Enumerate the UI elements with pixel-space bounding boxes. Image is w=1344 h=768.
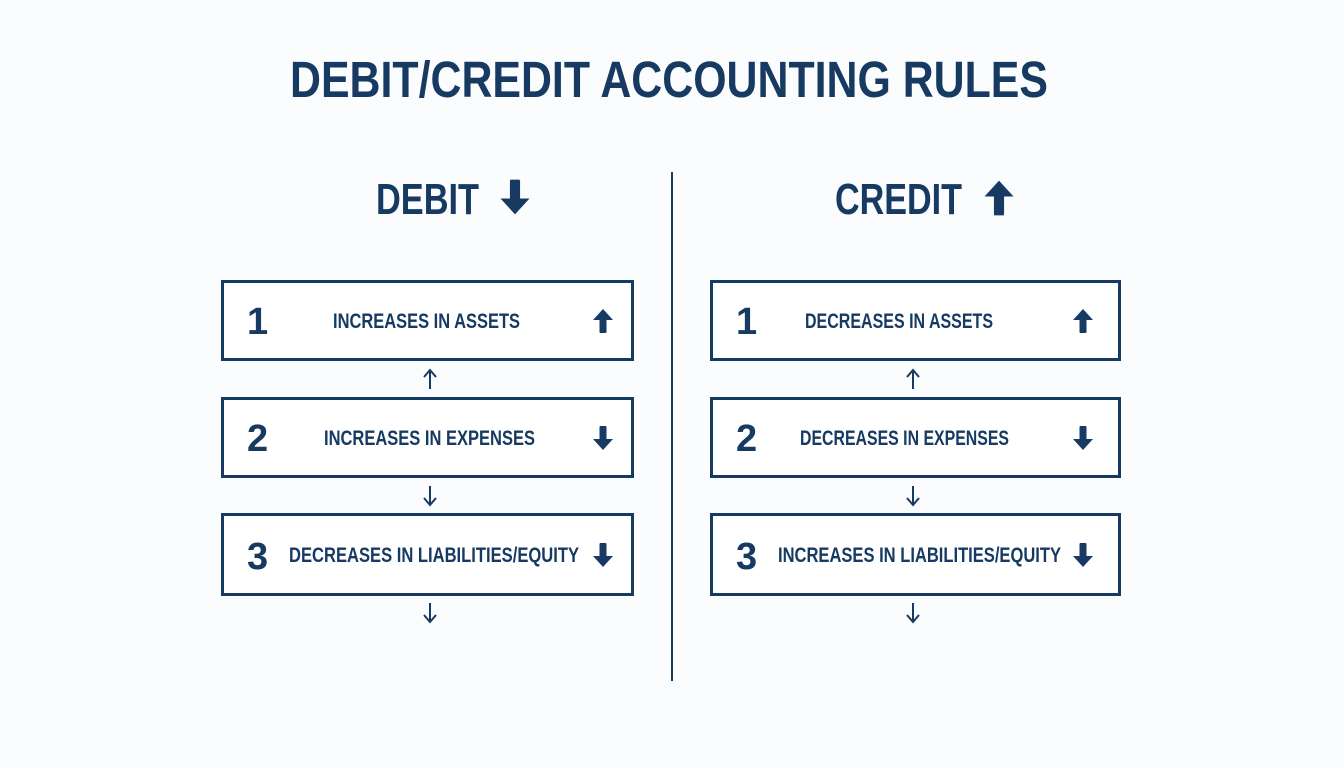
box: credit 1: 1	[736, 301, 757, 343]
heading: debit: DEBIT	[376, 175, 479, 224]
box: debit 2	[222, 398, 632, 476]
box: credit 3	[712, 514, 1120, 594]
box: debit 1: 1	[247, 301, 268, 343]
arrow: thin down	[907, 486, 919, 505]
box: credit 3: 3	[736, 536, 757, 578]
box: debit 2: INCREASES IN EXPENSES	[324, 427, 535, 450]
heading: credit: CREDIT	[835, 175, 962, 224]
box: debit 3: 3	[247, 536, 268, 578]
box: credit 2: DECREASES IN EXPENSES	[800, 427, 1009, 450]
box: credit 2: 2	[736, 418, 757, 460]
box: credit 3: INCREASES IN LIABILITIES/EQUITY	[778, 544, 1061, 567]
box: debit 1: INCREASES IN ASSETS	[333, 310, 520, 333]
arrow: thin down end	[907, 603, 919, 622]
box: credit 2	[712, 398, 1120, 476]
arrow: thin down end	[424, 603, 436, 622]
box: debit 1	[222, 282, 632, 360]
arrow: thin up	[907, 370, 919, 389]
box: credit 1: DECREASES IN ASSETS	[805, 310, 993, 333]
box: debit 3	[222, 514, 632, 594]
box: debit 2: 2	[247, 418, 268, 460]
box: debit 3: DECREASES IN LIABILITIES/EQUITY	[289, 544, 579, 567]
panel: credit	[712, 175, 1120, 622]
divider	[671, 172, 673, 681]
title: DEBIT/CREDIT ACCOUNTING RULES	[290, 51, 1048, 108]
box: credit 1	[712, 282, 1120, 360]
arrow: thin up	[424, 370, 436, 389]
arrow: thin down	[424, 486, 436, 505]
panel: debit	[222, 175, 632, 622]
